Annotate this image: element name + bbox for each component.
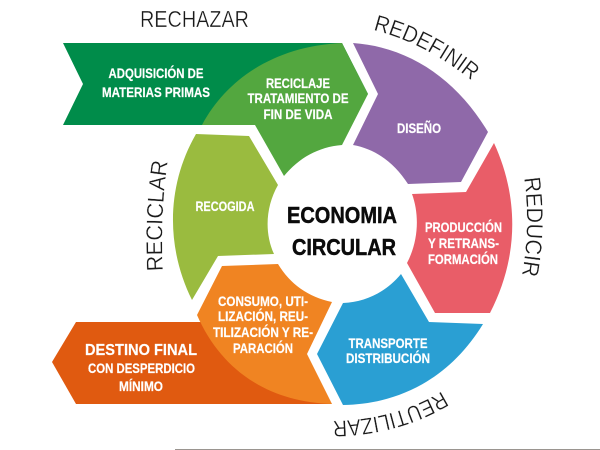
bottom grey edge xyxy=(175,449,600,450)
text: reciclaje: TRATAMIENTO DE xyxy=(248,91,348,106)
panel: transporte xyxy=(317,274,483,405)
text: reciclaje: FIN DE VIDA xyxy=(264,107,333,122)
text: produccion: FORMACIÓN xyxy=(428,252,498,267)
panel: adquisicion de materias primas xyxy=(63,43,368,125)
heading: Redefinir: REDEFINIR xyxy=(374,15,478,80)
text: reciclaje xyxy=(248,76,348,122)
heading: Rechazar: RECHAZAR xyxy=(140,6,249,32)
heading: Reciclar: RECICLAR xyxy=(146,161,168,270)
text: produccion: PRODUCCIÓN xyxy=(425,220,502,235)
title: economia circular xyxy=(287,202,397,260)
text: destino final: DESTINO FINAL xyxy=(85,342,197,359)
panel: recogida xyxy=(173,134,278,300)
text: consumo: LIZACIÓN, REU- xyxy=(218,309,308,324)
text: transporte: DISTRIBUCIÓN xyxy=(346,351,430,366)
text: destino final: CON DESPERDICIO xyxy=(88,361,195,376)
text: diseno: DISEÑO xyxy=(397,121,441,136)
text: recogida: RECOGIDA xyxy=(196,199,255,214)
panel: diseno xyxy=(353,43,488,184)
text: adquisicion: ADQUISICIÓN DE xyxy=(108,66,204,81)
heading: Reducir: REDUCIR xyxy=(522,178,543,276)
title: economia circular: ECONOMIA xyxy=(287,202,397,228)
text: consumo: TILIZACIÓN Y RE- xyxy=(213,325,313,340)
text: destino final xyxy=(85,342,197,394)
text: consumo: CONSUMO, UTI- xyxy=(218,294,308,309)
text: produccion: Y RETRANS- xyxy=(428,236,499,251)
text: adquisicion xyxy=(102,66,210,100)
text: transporte xyxy=(346,336,430,366)
heading: Reutilizar: REUTILIZAR xyxy=(334,392,448,436)
panel: reciclaje xyxy=(202,43,368,176)
title: economia circular: CIRCULAR xyxy=(292,234,396,260)
text: transporte: TRANSPORTE xyxy=(348,336,428,351)
text: consumo xyxy=(213,294,313,356)
text: produccion xyxy=(425,220,502,267)
text: adquisicion: MATERIAS PRIMAS xyxy=(102,85,210,100)
panel: consumo xyxy=(197,264,332,404)
panel: destino final xyxy=(52,322,332,404)
text: consumo: PARACIÓN xyxy=(233,341,293,356)
text: destino final: MÍNIMO xyxy=(119,379,163,394)
panel: produccion xyxy=(407,143,512,313)
text: reciclaje: RECICLAJE xyxy=(266,76,330,91)
